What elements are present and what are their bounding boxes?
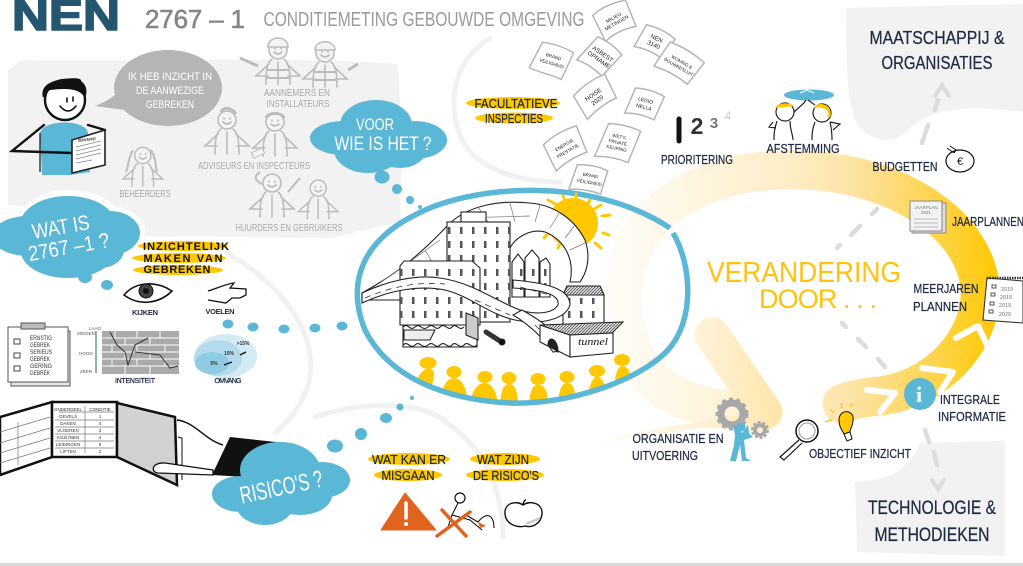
cloud: voor wie is het: VOOR bbox=[356, 115, 394, 134]
icon: calendar: 2018 bbox=[1000, 295, 1012, 301]
label: objectief inzicht: OBJECTIEF INZICHT bbox=[809, 447, 911, 461]
labels: wat kan er misgaan bbox=[368, 452, 450, 483]
facultative inspection papers: PRIVATE bbox=[608, 138, 628, 147]
hand holding report booklet: 1 bbox=[99, 414, 102, 419]
hand holding report booklet: 4 bbox=[99, 421, 102, 426]
panel: technologie en methodieken bbox=[855, 441, 1005, 556]
extent diagram: 5% bbox=[210, 361, 218, 367]
label: prioritering: PRIORITERING bbox=[661, 152, 733, 167]
cloud: risico's bbox=[212, 442, 350, 525]
facultative inspection papers: LEGIO bbox=[637, 96, 654, 106]
group: huurders en gebruikers bbox=[236, 172, 343, 234]
hand holding report booklet: KOZIJNEN bbox=[57, 435, 79, 440]
icon: info bbox=[904, 378, 936, 410]
numbers 1234: 2 bbox=[691, 113, 703, 139]
labels: wat zijn de risico's: DE RISICO'S bbox=[473, 468, 539, 483]
panel: target groups bbox=[8, 60, 402, 238]
change heading: VERANDERING bbox=[707, 257, 901, 289]
icon: calendar: 2019 bbox=[1001, 287, 1013, 293]
label: meerjaren plannen: PLANNEN bbox=[913, 299, 967, 314]
hand holding report booklet bbox=[0, 402, 285, 485]
white chevrons bbox=[867, 326, 987, 412]
sun bbox=[544, 194, 610, 251]
facultative inspection papers: NELLA bbox=[635, 103, 653, 113]
numbers 1234 bbox=[679, 109, 732, 141]
facultative inspection papers: OPNAME bbox=[586, 51, 611, 70]
background arcs bbox=[227, 38, 560, 537]
extent diagram bbox=[194, 334, 257, 385]
facultative inspection papers: BOUWBESLUIT bbox=[663, 57, 694, 78]
icon: eye: KIJKEN bbox=[132, 308, 158, 317]
heading: inzichtelijk maken van gebreken: INZICHTELIJK bbox=[143, 241, 229, 253]
facultative inspection papers: NOISE bbox=[584, 88, 603, 103]
group: beheerders: BEHEERDERS bbox=[120, 189, 171, 200]
icon: figure with gears bbox=[717, 399, 768, 461]
title: standard number: 2767 – 1 bbox=[145, 4, 245, 34]
facultative inspection papers: METINGEN bbox=[604, 14, 630, 33]
label: integrale informatie: INFORMATIE bbox=[938, 409, 1006, 424]
speech bubble bbox=[95, 50, 222, 126]
figure: person with report bbox=[12, 78, 105, 175]
hand holding report booklet: 2 bbox=[99, 449, 102, 454]
intensity wall chart: ZEER bbox=[80, 369, 93, 374]
hand holding report booklet: 3 bbox=[99, 428, 102, 433]
checklist clipboard: SERIEUS bbox=[30, 350, 52, 356]
intensity wall chart bbox=[77, 326, 179, 385]
thought dots: voor wie bbox=[374, 170, 422, 209]
thought dots: to central ellipse bbox=[222, 320, 348, 334]
yellow audience bbox=[418, 354, 630, 400]
icon: jaarplan: JAARPLAN bbox=[914, 205, 938, 210]
icon: warning triangle bbox=[381, 493, 436, 530]
dashed arrow down bbox=[842, 323, 944, 489]
checklist clipboard: GERING bbox=[30, 364, 52, 370]
hand holding report booklet: LEIDINGEN bbox=[56, 442, 80, 447]
heading: facultatieve inspecties: FACULTATIEVE bbox=[474, 96, 558, 111]
icon: calendar bbox=[983, 278, 1023, 323]
checklist clipboard: GEBREK bbox=[30, 357, 50, 363]
heading: facultatieve inspecties: INSPECTIES bbox=[485, 111, 543, 126]
labels: wat zijn de risico's bbox=[466, 452, 544, 483]
group: adviseurs en inspecteurs bbox=[198, 108, 310, 172]
hand holding report booklet: VLOEREN bbox=[57, 428, 79, 433]
intensity wall chart: MIDDEN bbox=[77, 331, 95, 336]
intensity wall chart: LAAG bbox=[89, 326, 101, 331]
facultative inspection papers: BRAND bbox=[545, 52, 563, 62]
city illustration bbox=[362, 202, 623, 357]
label: integrale informatie: INTEGRALE bbox=[940, 392, 1000, 407]
hand holding report booklet: 4 bbox=[99, 435, 102, 440]
city illustration: tunnel bbox=[578, 336, 608, 348]
icon: apple bbox=[505, 500, 542, 527]
change heading bbox=[707, 257, 901, 314]
facultative inspection papers: PRESTATIE bbox=[556, 143, 580, 159]
label: organisatie en uitvoering: ORGANISATIE EN bbox=[632, 431, 724, 446]
hand holding report booklet: GEVELS bbox=[59, 414, 77, 419]
dashed arrow up bbox=[837, 85, 949, 248]
icon: magnifier bbox=[780, 420, 818, 460]
checklist clipboard: GEBREK bbox=[30, 371, 50, 377]
heading: inzichtelijk maken van gebreken: GEBREKEN bbox=[144, 264, 211, 276]
facultative inspection papers: ASBEST bbox=[591, 45, 614, 64]
icon: money bag bbox=[946, 146, 974, 172]
cloud: wat is 2767-1 bbox=[0, 195, 140, 278]
extent diagram: >15% bbox=[237, 341, 250, 347]
facultative inspection papers: NEN bbox=[649, 34, 663, 45]
label: afstemming: AFSTEMMING bbox=[766, 141, 840, 156]
heading: maatschappij en organisaties bbox=[870, 28, 1004, 73]
facultative inspection papers bbox=[529, 0, 706, 196]
title: subtitle: CONDITIEMETING GEBOUWDE OMGEVING bbox=[264, 9, 584, 31]
icon: hand bbox=[206, 283, 246, 316]
hand holding report booklet: LIFTEN bbox=[60, 449, 76, 454]
heading: technologie en methodieken: TECHNOLOGIE & bbox=[868, 498, 996, 519]
icon: digger crossed bbox=[437, 493, 494, 536]
label: organisatie en uitvoering: UITVOERING bbox=[632, 448, 698, 463]
icon: calendar: 2020 bbox=[999, 312, 1011, 318]
hand holding report booklet: DAKEN bbox=[60, 421, 76, 426]
facultative inspection papers: 3140 bbox=[646, 40, 661, 51]
checklist clipboard bbox=[8, 323, 70, 386]
label: budgetten: BUDGETTEN bbox=[872, 159, 938, 174]
icon: jaarplan: 2021 bbox=[921, 210, 932, 215]
speech bubble: GEBREKEN bbox=[146, 99, 194, 111]
heading: inzichtelijk maken van gebreken: MAKEN VAN bbox=[144, 253, 223, 265]
icon: money bag: € bbox=[957, 156, 963, 168]
group: aannemers en installateurs bbox=[240, 38, 358, 110]
heading: facultatieve inspecties bbox=[466, 96, 560, 126]
facultative inspection papers: KEURING bbox=[606, 144, 628, 153]
group: aannemers en installateurs: INSTALLATEURS bbox=[266, 99, 330, 110]
hand holding report booklet: 5 bbox=[99, 442, 102, 447]
icon: jaarplan bbox=[910, 201, 946, 233]
speech bubble: IK HEB INZICHT IN bbox=[128, 71, 212, 83]
thought dots: wat is bbox=[78, 271, 113, 290]
facultative inspection papers: WONING & bbox=[670, 54, 693, 70]
group: beheerders bbox=[120, 147, 171, 200]
figure: person with report: GEBOUW RAPPORT bbox=[78, 136, 96, 143]
gold arrow head bbox=[597, 335, 782, 443]
facultative inspection papers: WET'S bbox=[612, 133, 626, 141]
group: adviseurs en inspecteurs: ADVISEURS EN INSPECTEURS bbox=[198, 161, 310, 172]
panel: maatschappij en organisaties bbox=[846, 4, 1023, 140]
label: integrale informatie bbox=[938, 392, 1006, 424]
bottom strip bbox=[0, 563, 1023, 566]
facultative inspection papers: MILIEU bbox=[605, 11, 623, 25]
change heading: DOOR . . . bbox=[759, 284, 877, 314]
facultative inspection papers: VEILIGHEID bbox=[577, 178, 603, 187]
icon: info: i bbox=[916, 382, 922, 407]
hand holding report booklet: CONDITIE bbox=[89, 407, 111, 412]
facultative inspection papers: BRAND bbox=[582, 172, 600, 180]
cloud: voor wie is het bbox=[310, 100, 447, 173]
gold change cycle ring bbox=[622, 170, 980, 412]
labels: wat kan er misgaan: MISGAAN bbox=[382, 468, 434, 483]
intensity wall chart: INTENSITEIT bbox=[115, 378, 156, 385]
extent diagram: 10% bbox=[224, 351, 235, 357]
checklist clipboard: ERNSTIG bbox=[30, 336, 52, 342]
numbers 1234: 4 bbox=[725, 109, 732, 123]
hand holding report booklet: ONDERDEEL bbox=[54, 407, 82, 412]
extent diagram: OMVANG bbox=[214, 378, 242, 385]
facultative inspection papers: 2020 bbox=[591, 94, 606, 107]
cloud: voor wie is het: WIE IS HET ? bbox=[334, 134, 432, 155]
group: huurders en gebruikers: HUURDERS EN GEBRUIKERS bbox=[236, 223, 343, 234]
label: organisatie en uitvoering bbox=[632, 431, 724, 463]
group: aannemers en installateurs: AANNEMERS EN bbox=[264, 88, 330, 99]
facultative inspection papers: VEILIGHEID bbox=[539, 57, 565, 70]
icon: high five bbox=[769, 90, 840, 140]
icon: light bulb bbox=[825, 403, 853, 441]
icon: calendar: 2019 bbox=[999, 303, 1011, 309]
cloud: wat is 2767-1: 2767 –1 ? bbox=[26, 229, 111, 266]
icon: hand: VOELEN bbox=[206, 307, 234, 316]
heading: technologie en methodieken: METHODIEKEN bbox=[874, 525, 990, 546]
heading: inzichtelijk maken van gebreken bbox=[132, 241, 229, 276]
facultative inspection papers: ENERGIE bbox=[554, 138, 574, 152]
cloud: wat is 2767-1: WAT IS bbox=[30, 211, 91, 244]
checklist clipboard: GEBREK bbox=[30, 343, 50, 349]
intensity wall chart: HOOG bbox=[79, 351, 93, 356]
thought dots: risico's bbox=[327, 396, 414, 452]
heading: maatschappij en organisaties: ORGANISATIES bbox=[882, 53, 992, 73]
central city ellipse bbox=[357, 190, 688, 410]
label: meerjaren plannen: MEERJAREN bbox=[914, 281, 978, 296]
cloud: risico's: RISICO'S ? bbox=[238, 466, 325, 510]
label: meerjaren plannen bbox=[913, 281, 978, 314]
speech bubble: DE AANWEZIGE bbox=[136, 85, 204, 97]
numbers 1234: 3 bbox=[710, 115, 718, 132]
labels: wat zijn de risico's: WAT ZIJN bbox=[477, 452, 529, 467]
heading: maatschappij en organisaties: MAATSCHAPPIJ & bbox=[870, 28, 1004, 48]
labels: wat kan er misgaan: WAT KAN ER bbox=[372, 452, 446, 467]
heading: technologie en methodieken bbox=[868, 498, 996, 546]
icon: eye bbox=[124, 284, 172, 317]
